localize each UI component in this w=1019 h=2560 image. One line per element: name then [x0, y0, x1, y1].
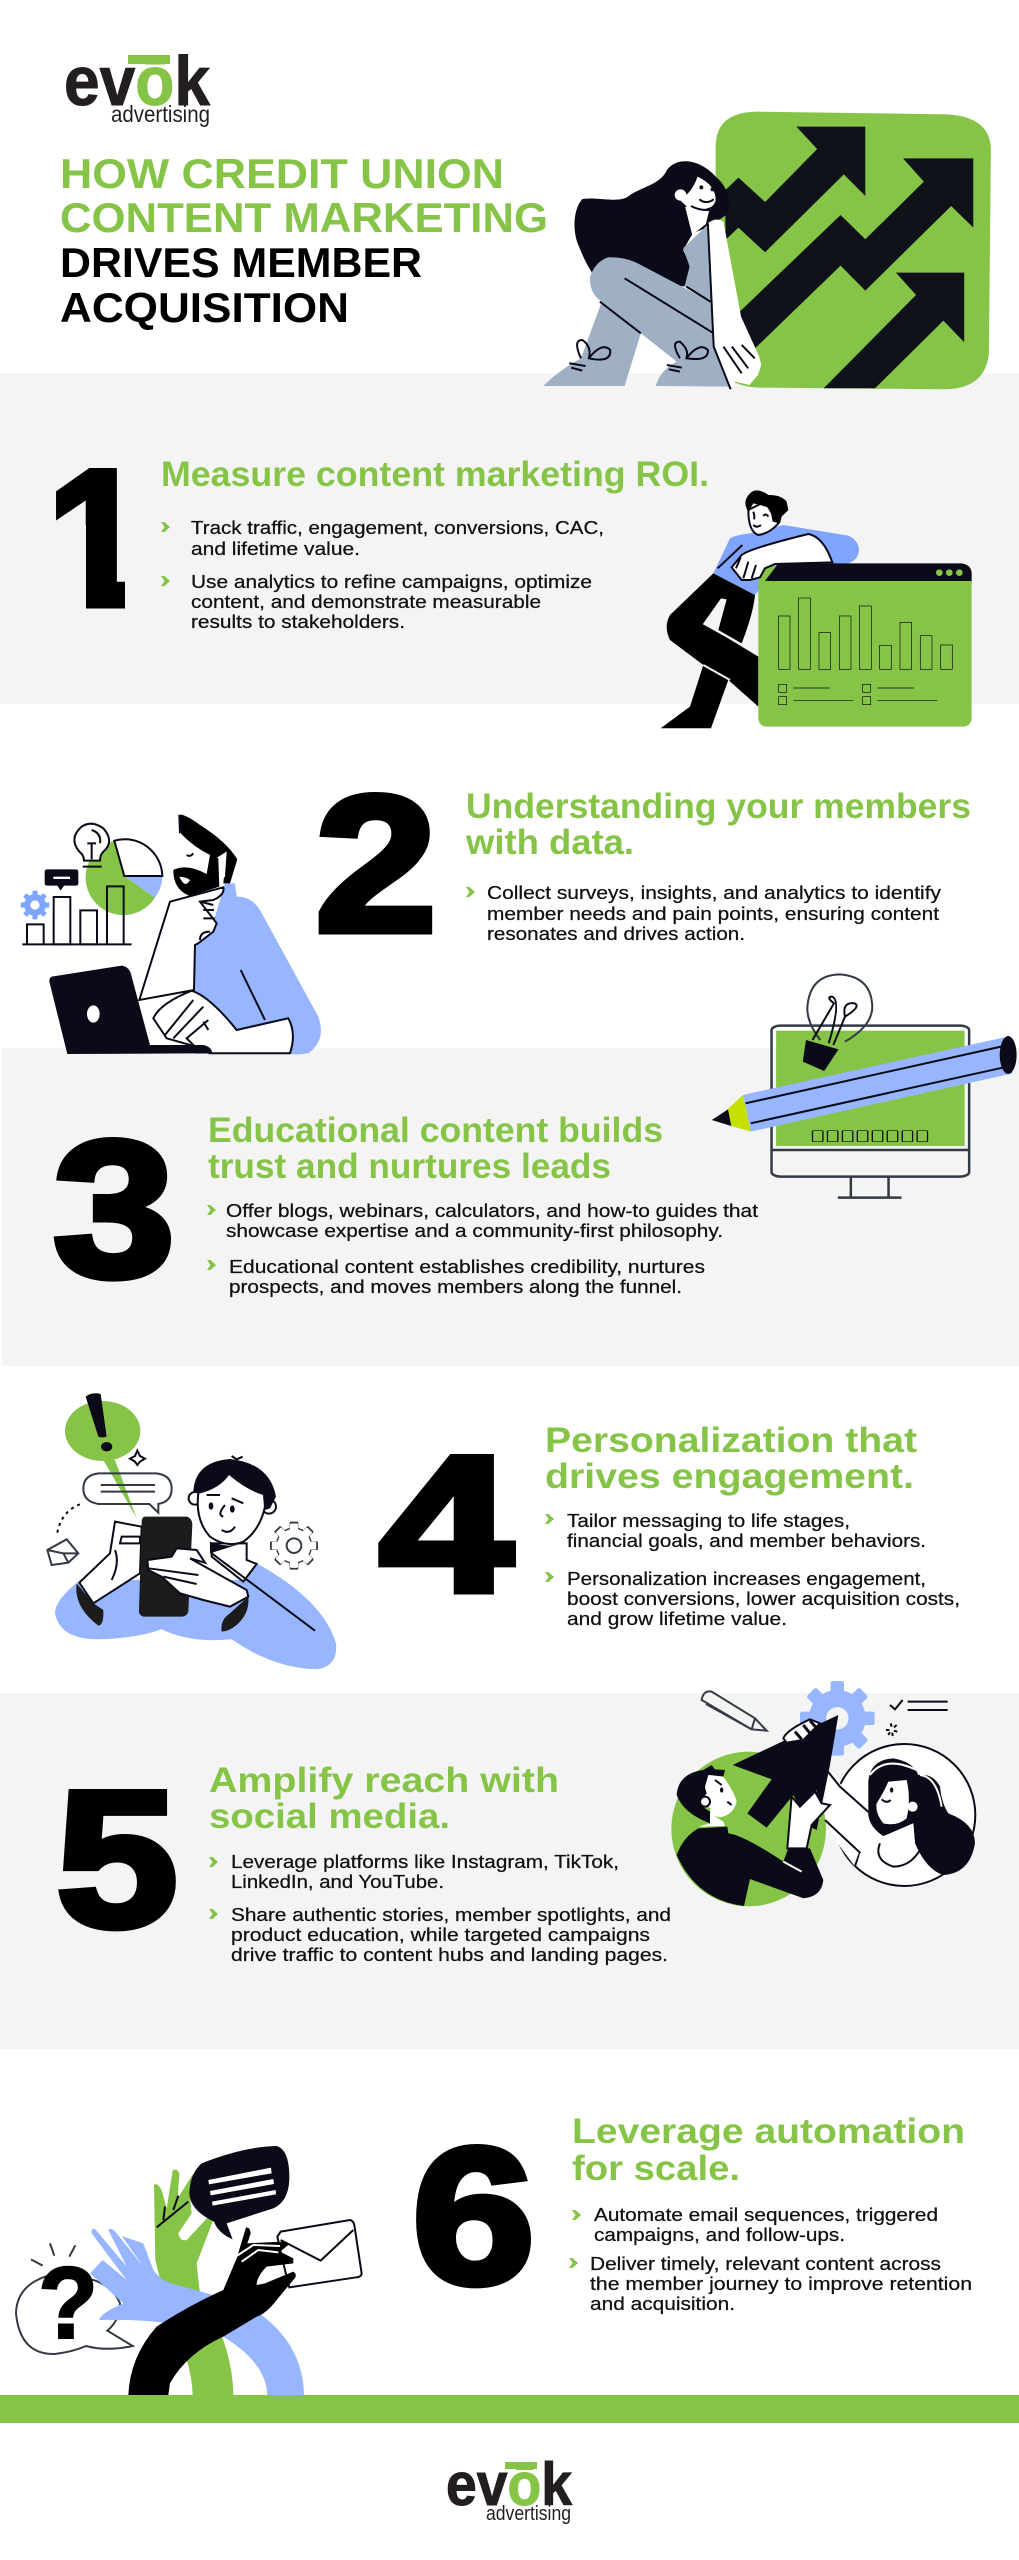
- bullets: step 2: member needs and pain points, ensuring content: [487, 903, 939, 924]
- bullets: step 6: campaigns, and follow-ups.: [594, 2224, 845, 2245]
- bullets: step 2: resonates and drives action.: [487, 923, 745, 944]
- bullets: step 3: Educational content establishes credibility, nurtures: [229, 1256, 705, 1277]
- green footer bar: [0, 2395, 1019, 2423]
- bullets: step 1: Track traffic, engagement, conversions, CAC,: [191, 517, 604, 538]
- bullets: step 6: the member journey to improve retention: [590, 2273, 972, 2294]
- heading: step 1: Measure content marketing ROI.: [161, 455, 709, 494]
- illustration: two people with megaphone and gear: [671, 1681, 975, 1906]
- number 5: 5: [56, 1751, 178, 1968]
- bullets: step 4: and grow lifetime value.: [567, 1608, 787, 1629]
- heading: step 6: Leverage automation: [572, 2112, 965, 2151]
- bullets: step 5: [209, 1851, 671, 1965]
- bullets: step 2: Collect surveys, insights, and analytics to identify: [487, 882, 942, 903]
- title: CONTENT MARKETING: [60, 194, 548, 241]
- heading: step 3: Educational content builds: [208, 1111, 663, 1150]
- bullets: step 3: [207, 1200, 758, 1297]
- title: DRIVES MEMBER: [60, 239, 422, 286]
- logo: top: evōk: [64, 42, 210, 120]
- number 6: 6: [412, 2108, 535, 2325]
- bullets: step 1: results to stakeholders.: [191, 611, 405, 632]
- background band: step 5: [0, 1693, 1019, 2049]
- bullets: step 5: Share authentic stories, member spotlights, and: [231, 1904, 671, 1925]
- logo: footer: advertising: [486, 2503, 571, 2525]
- heading: step 6: for scale.: [572, 2149, 740, 2188]
- bullets: step 5: product education, while targeted campaigns: [231, 1924, 650, 1945]
- bullets: step 1: Use analytics to refine campaigns, optimize: [191, 571, 592, 592]
- number 4: 4: [379, 1416, 513, 1633]
- bullets: step 6: Deliver timely, relevant content across: [590, 2253, 941, 2274]
- panel: step 3: [53, 974, 1017, 1318]
- heading: step 2: with data.: [465, 823, 634, 862]
- illustration: woman with growth arrows: [543, 112, 991, 389]
- illustration: man thinking at laptop with charts: [21, 815, 321, 1054]
- background band: step 1: [0, 373, 1019, 704]
- title: ACQUISITION: [60, 284, 349, 331]
- heading: step 6: [572, 2112, 965, 2188]
- panel: step 1: [56, 460, 972, 728]
- illustration: person using phone with alert: [47, 1393, 336, 1669]
- panel: step 5: [56, 1681, 975, 1968]
- illustration: monitor, light bulb and pencil: [712, 974, 1017, 1198]
- bullets: step 4: Tailor messaging to life stages,: [567, 1510, 850, 1531]
- bullets: step 6: and acquisition.: [590, 2293, 735, 2314]
- bullets: step 5: LinkedIn, and YouTube.: [231, 1871, 444, 1892]
- title: HOW CREDIT UNION: [60, 150, 504, 197]
- bullets: step 6: Automate email sequences, triggered: [594, 2204, 938, 2225]
- bullets: step 3: showcase expertise and a community-first philosophy.: [226, 1220, 723, 1241]
- bullets: step 5: Leverage platforms like Instagram, TikTok,: [231, 1851, 619, 1872]
- illustration: hands with speech bubbles and envelope: [16, 2146, 362, 2395]
- number 1: 1: [47, 430, 147, 647]
- logo: top: advertising: [111, 101, 210, 127]
- heading: step 4: drives engagement.: [545, 1457, 914, 1496]
- bullets: step 4: [545, 1510, 960, 1629]
- heading: step 5: [209, 1761, 559, 1836]
- bullets: step 3: Offer blogs, webinars, calculators, and how-to guides that: [226, 1200, 758, 1221]
- panel: step 4: [47, 1393, 960, 1669]
- heading: step 5: Amplify reach with: [209, 1761, 559, 1800]
- bullets: step 1: [161, 517, 604, 632]
- panel: step 2: [21, 756, 971, 1054]
- bullets: step 4: Personalization increases engagement,: [567, 1568, 926, 1589]
- background band: step 3: [2, 1048, 1019, 1366]
- bullets: step 3: prospects, and moves members along the funnel.: [229, 1276, 682, 1297]
- heading: step 3: trust and nurtures leads: [208, 1147, 611, 1186]
- heading: step 4: Personalization that: [545, 1421, 917, 1460]
- bullets: step 5: drive traffic to content hubs and landing pages.: [231, 1944, 668, 1965]
- bullets: step 4: financial goals, and member behaviors.: [567, 1530, 926, 1551]
- title: [60, 150, 548, 331]
- logo: footer: evōk: [446, 2451, 573, 2518]
- heading: step 5: social media.: [209, 1797, 450, 1836]
- heading: step 2: [465, 787, 971, 862]
- illustration: man leaning on analytics screen: [661, 490, 972, 728]
- bullets: step 4: boost conversions, lower acquisition costs,: [567, 1588, 960, 1609]
- number 2: 2: [315, 756, 437, 973]
- heading: step 3: [208, 1111, 663, 1186]
- bullets: step 1: content, and demonstrate measurable: [191, 591, 541, 612]
- bullets: step 2: [466, 882, 942, 944]
- heading: step 4: [545, 1421, 917, 1496]
- bullets: step 6: [569, 2204, 972, 2314]
- number 3: 3: [53, 1101, 175, 1318]
- panel: step 6: [16, 2108, 972, 2395]
- question mark: ?: [38, 2246, 98, 2360]
- bullets: step 1: and lifetime value.: [191, 538, 360, 559]
- heading: step 2: Understanding your members: [466, 787, 971, 826]
